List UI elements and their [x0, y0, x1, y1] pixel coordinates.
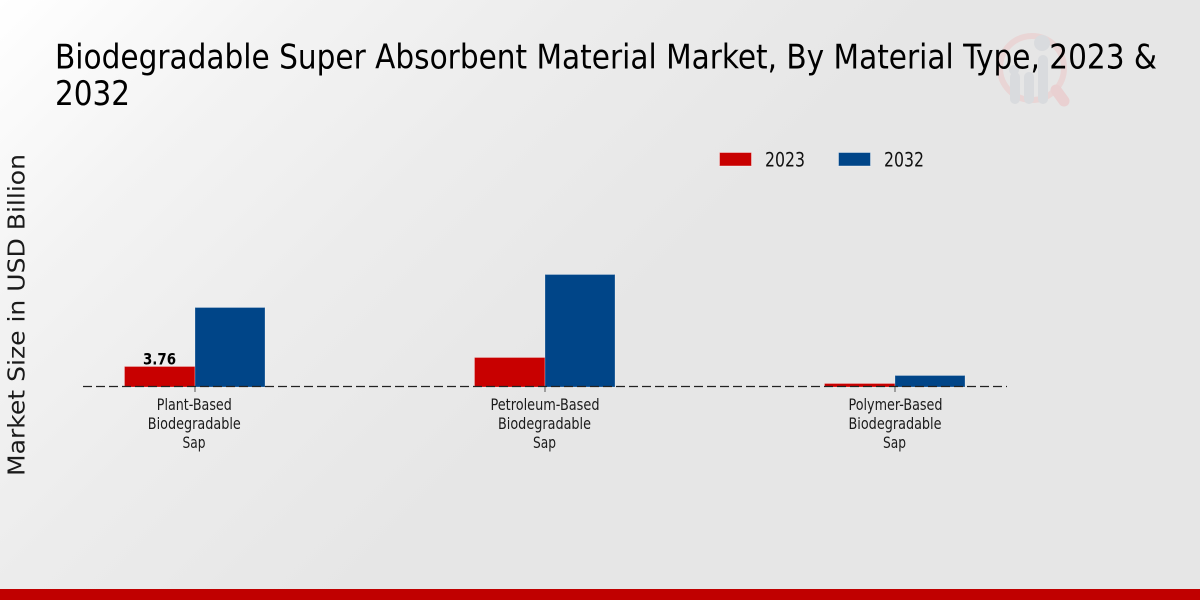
- legend item: 2023: 2023: [765, 149, 805, 172]
- y axis label: Market Size in USD Billion: [4, 154, 30, 476]
- legend item: 2032: [838, 149, 924, 172]
- title: 2032: [55, 74, 130, 113]
- data label: 3.76: [143, 349, 176, 368]
- icon: watermark logo: [1000, 35, 1064, 104]
- category label: Plant-Based: Biodegradable: [148, 414, 241, 433]
- legend item: 2023: [720, 149, 805, 172]
- category label: Plant-Based: Sap: [182, 433, 206, 452]
- category label: Petroleum-Based: Sap: [533, 433, 556, 452]
- title: [55, 38, 1157, 113]
- bar chart: [83, 274, 1007, 452]
- category label: Polymer-Based: Sap: [883, 433, 906, 452]
- bars: Polymer-Based: [824, 376, 965, 387]
- category label: Plant-Based: Plant-Based: [157, 395, 232, 414]
- category label: Polymer-Based: [848, 395, 942, 452]
- bars: Petroleum-Based: [474, 274, 615, 387]
- category label: Petroleum-Based: [490, 395, 600, 452]
- category label: Polymer-Based: Biodegradable: [848, 414, 942, 433]
- category label: Petroleum-Based: Petroleum-Based: [490, 395, 600, 414]
- title: Biodegradable Super Absorbent Material Market, By Material Type, 2023 &: [55, 38, 1157, 76]
- category label: Polymer-Based: Polymer-Based: [848, 395, 942, 414]
- bars: Plant-Based: [124, 308, 265, 387]
- footer bar: [0, 589, 1200, 600]
- category label: Plant-Based: [148, 395, 241, 452]
- category label: Petroleum-Based: Biodegradable: [498, 414, 591, 433]
- legend item: 2032: 2032: [884, 149, 924, 172]
- legend: [720, 149, 924, 172]
